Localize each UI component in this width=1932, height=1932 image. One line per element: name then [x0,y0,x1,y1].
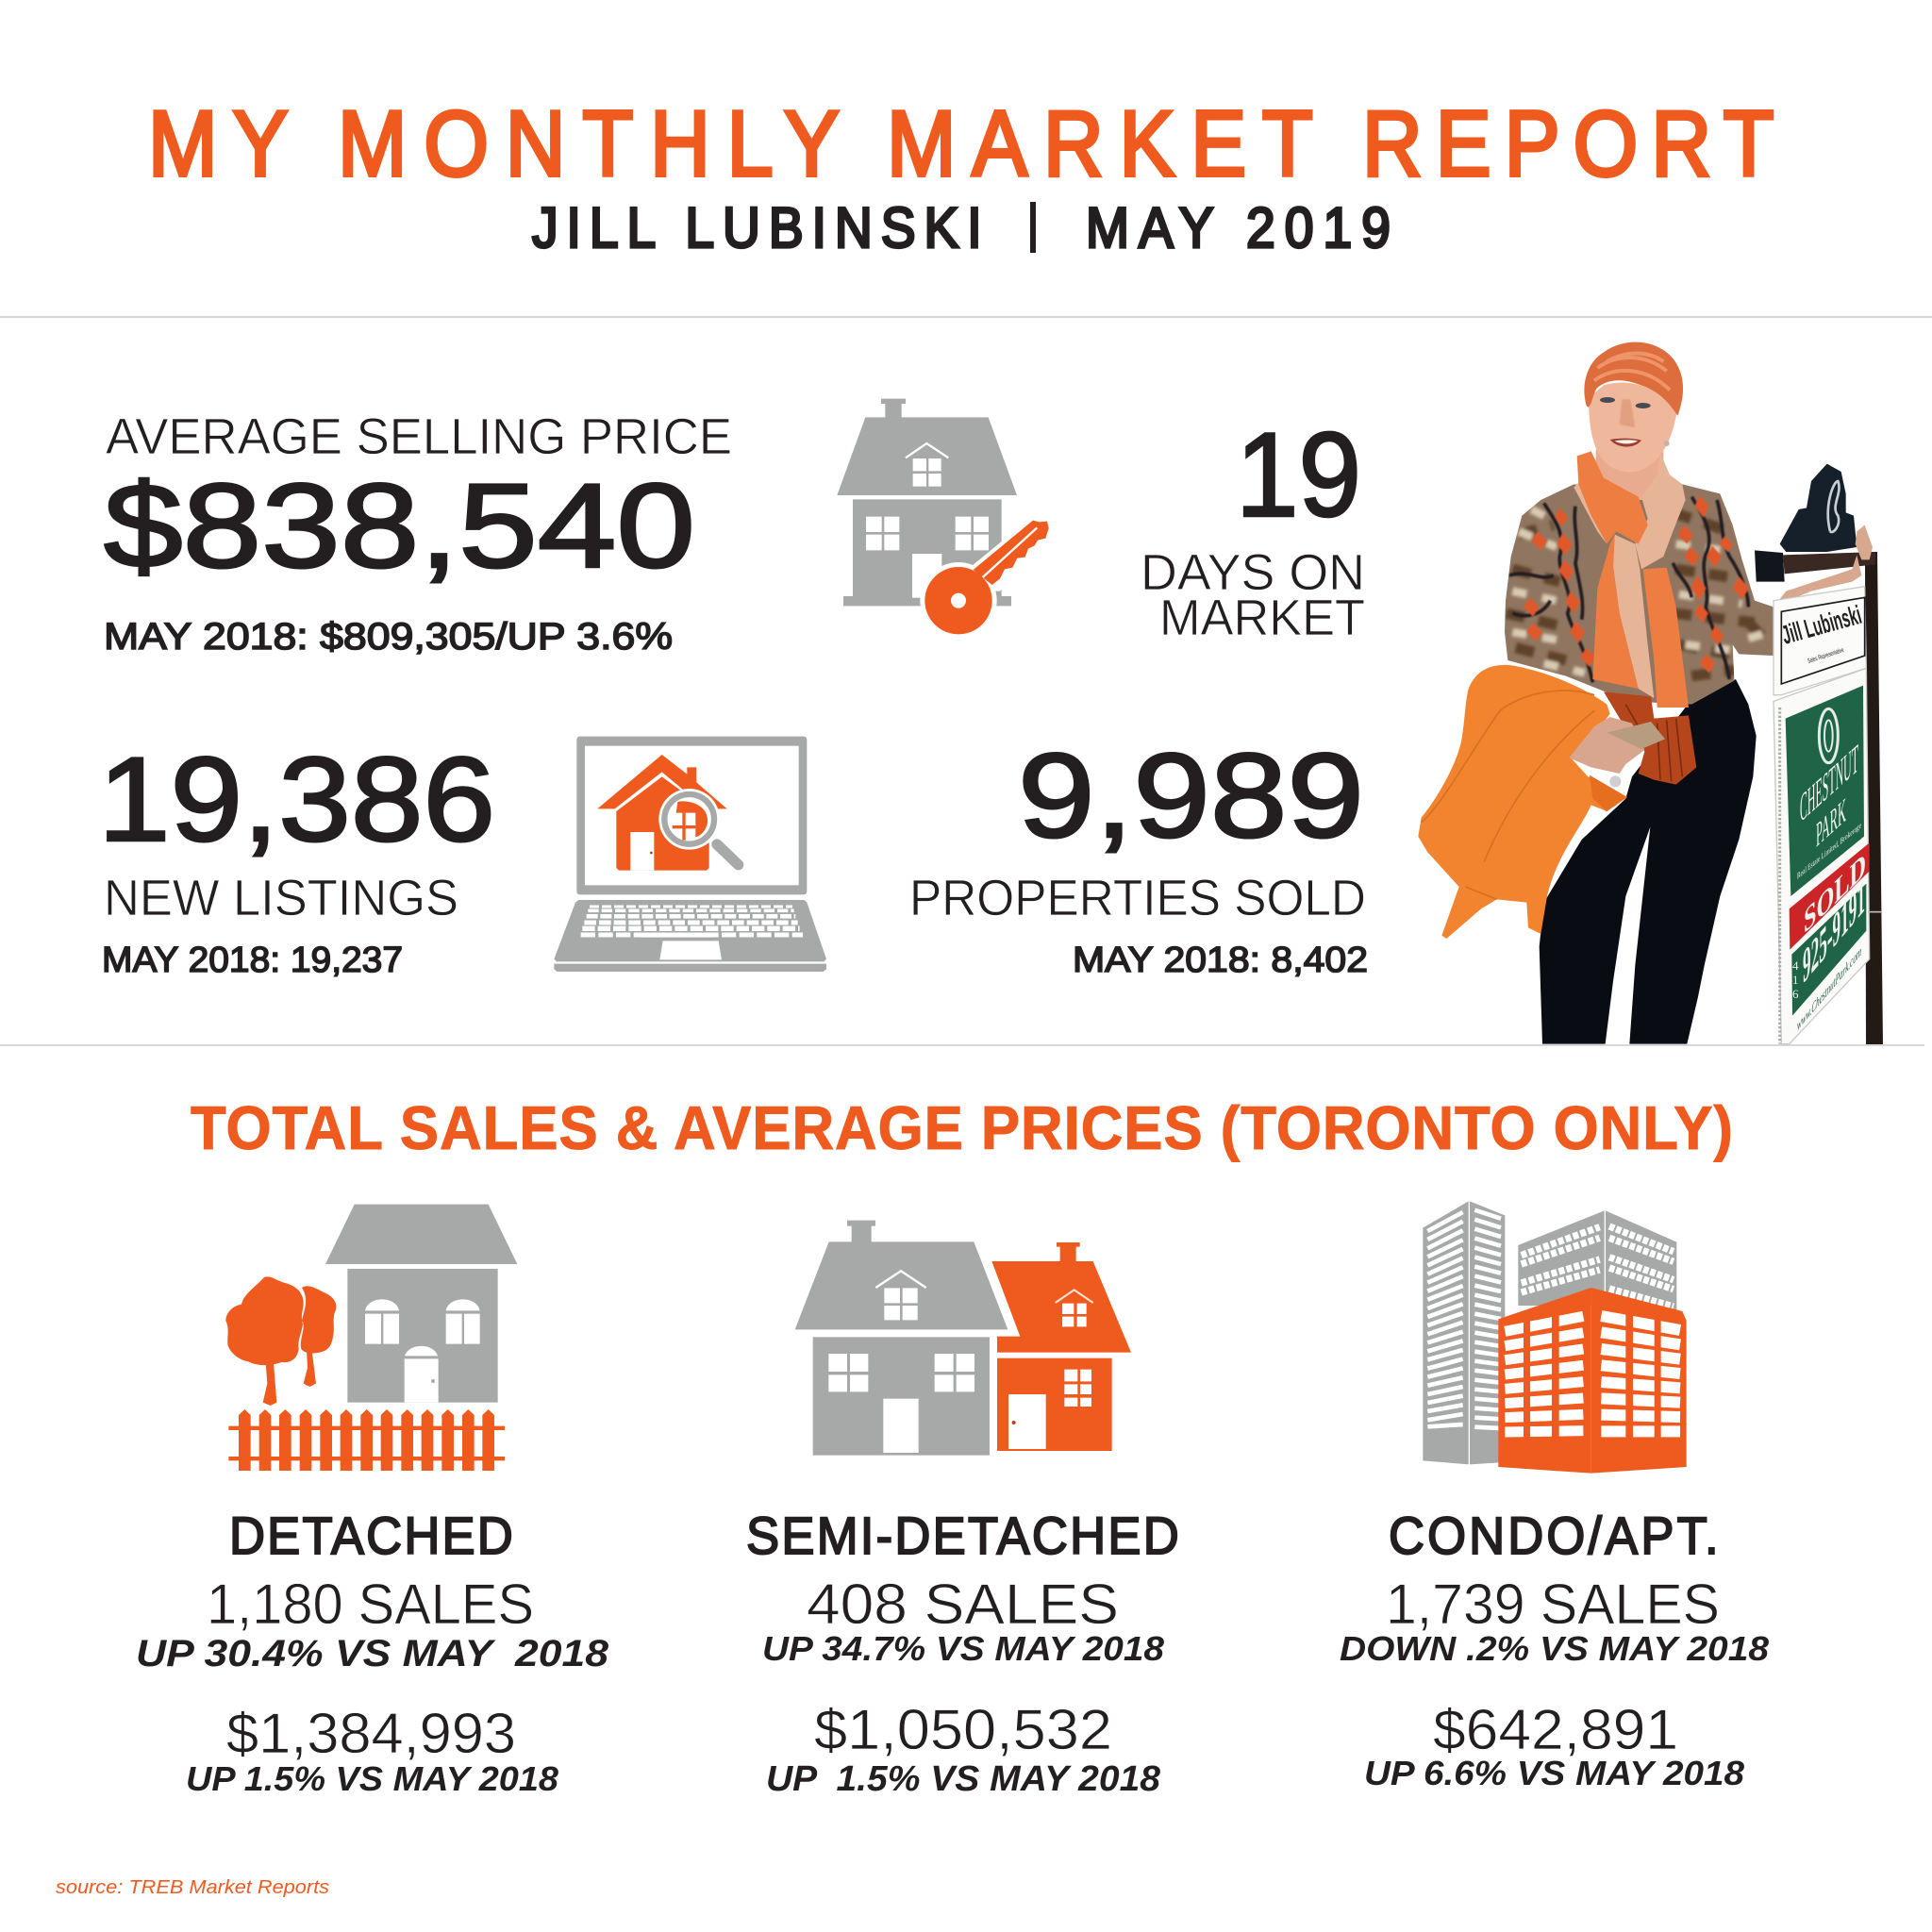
stat label: NEW LISTINGS [104,870,458,926]
blouse [1500,481,1776,708]
category label: DETACHED [229,1507,513,1565]
sales change: DOWN .2% VS MAY 2018 [1340,1629,1769,1668]
sign bracket and ornament [1755,550,1785,582]
fringe [1604,691,1696,785]
price change: UP 1.5% VS MAY 2018 [186,1759,558,1798]
subtitle [532,197,1391,260]
icon: detached house with trees and fence [225,1205,517,1471]
panel: new listings [98,732,495,980]
subtitle: MAY 2019 [1086,197,1391,260]
section heading: TOTAL SALES & AVERAGE PRICES (TORONTO ONLY) [191,1095,1733,1162]
sales count: 408 SALES [807,1573,1119,1636]
average price: $642,891 [1433,1698,1678,1761]
icon: condo towers [1423,1201,1687,1474]
sign text: 6 [1792,987,1799,1001]
comparison: MAY 2018: $809,305/UP 3.6% [104,616,673,658]
subtitle: JILL LUBINSKI [532,197,982,260]
sign text: PARK [1816,791,1846,855]
icon: semi-detached houses [795,1221,1131,1456]
coat, hand and green sign [1418,665,1882,1044]
price change: UP 6.6% VS MAY 2018 [1364,1754,1744,1792]
coat [1418,665,1627,939]
comparison: MAY 2018: 19,237 [102,941,403,980]
stat label: AVERAGE SELLING PRICE [106,408,732,465]
stat label: MARKET [1159,590,1365,646]
panel: properties sold [909,728,1368,980]
stat label: DAYS ON [1141,544,1365,601]
title: MONTHLY [338,92,840,195]
source note: source: TREB Market Reports [56,1877,329,1898]
sign text: Jill Lubinski [1778,600,1864,650]
sign text [1778,600,1866,1035]
title: MARKET [887,92,1313,195]
panel: condo stats [1340,1507,1769,1792]
sign text: Real Estate Limited, Brokerage [1797,821,1861,882]
icon: laptop with house and magnifier [554,737,826,972]
sign text: 1 [1792,973,1798,987]
photo: agent with sold sign [1418,342,1883,1044]
sign text: SOLD [1804,844,1866,941]
sign text: 4 [1792,958,1799,973]
panel: detached stats [136,1507,609,1798]
name sign [1774,587,1866,695]
stat value: 19,386 [98,732,495,866]
sales count: 1,739 SALES [1386,1573,1720,1636]
stat value: 19 [1236,408,1361,541]
average price: $1,384,993 [226,1702,516,1765]
panel: semi-detached stats [746,1507,1179,1799]
title: REPORT [1362,92,1774,195]
price change: UP 1.5% VS MAY 2018 [766,1759,1161,1799]
stat value: 9,989 [1018,728,1364,862]
stat value: $838,540 [104,458,695,592]
sign text: Sales Representative [1807,647,1845,665]
sales change: UP 34.7% VS MAY 2018 [762,1629,1164,1668]
comparison: MAY 2018: 8,402 [1073,941,1368,980]
panel: header [148,92,1774,260]
sign post [1865,552,1883,1044]
title: MY [148,92,289,195]
head and neck [1596,450,1663,500]
category label: CONDO/APT. [1389,1507,1719,1565]
figure upper body and sign top [1500,342,1875,708]
listing sign [1774,668,1870,1044]
hand and phone [1569,717,1644,774]
sales count: 1,180 SALES [207,1573,534,1636]
title [148,92,1774,195]
panel: days on market [1141,408,1365,646]
panel: average selling price [104,408,732,658]
pants [1540,679,1757,1044]
sign text: www.ChestnutPark.com [1797,943,1861,1035]
average price: $1,050,532 [814,1698,1112,1761]
stat label: PROPERTIES SOLD [909,870,1366,926]
category label: SEMI-DETACHED [746,1507,1179,1565]
sales change: UP 30.4% VS MAY 2018 [136,1633,609,1674]
scarf [1635,453,1686,569]
icon: house with key [837,399,1054,639]
